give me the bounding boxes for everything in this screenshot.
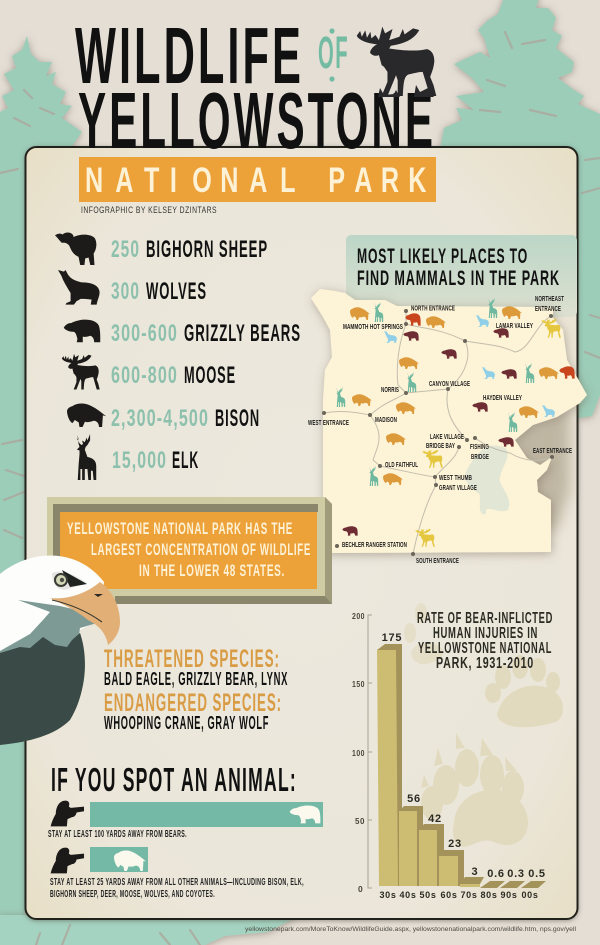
decade labels: 30s [380, 890, 396, 900]
icon: bighorn sheep [55, 232, 96, 265]
count: bison: 2,300-4,500 [111, 405, 209, 432]
count: wolves: WOLVES [146, 278, 207, 305]
map place labels: LAKE VILLAGE [430, 432, 464, 441]
bar values: 3 [472, 866, 478, 878]
map place labels: SOUTH ENTRANCE [416, 556, 459, 565]
map place labels: GRANT VILLAGE [439, 483, 477, 492]
main paper panel [26, 147, 578, 919]
y axis: 0 [358, 884, 363, 894]
decade labels: 60s [441, 890, 457, 900]
count: moose: MOOSE [184, 362, 236, 389]
threatened species: THREATENED SPECIES: [104, 645, 280, 673]
map place labels: NORRIS [381, 385, 399, 394]
subtitle band: NATIONAL PARK [85, 161, 428, 200]
byline: INFOGRAPHIC BY KELSEY DZINTARS [81, 205, 217, 215]
count: elk: ELK [172, 447, 199, 474]
map place labels: CANYON VILLAGE [429, 379, 470, 388]
other animals distance note: BIGHORN SHEEP, DEER, MOOSE, WOLVES, AND COYOTES. [50, 888, 215, 900]
icon: photographer near bear [51, 801, 84, 826]
map place labels: BECHLER RANGER STATION [342, 540, 407, 549]
callout: largest concentration: IN THE LOWER 48 STATES. [139, 561, 285, 580]
decade labels: 70s [461, 890, 477, 900]
bar values: 42 [428, 813, 442, 825]
count: bighorn sheep: BIGHORN SHEEP [146, 236, 268, 263]
count: bighorn sheep [111, 236, 268, 263]
decade labels: 50s [420, 890, 436, 900]
bar values: 175 [382, 632, 402, 644]
icon: bison [67, 404, 106, 427]
endangered species: WHOOPING CRANE, GRAY WOLF [104, 713, 269, 733]
map place labels: WEST THUMB [439, 473, 472, 482]
count: grizzly bears: GRIZZLY BEARS [184, 320, 301, 347]
other animals distance note [50, 876, 304, 900]
y axis: 150 [352, 679, 365, 689]
bear paw watermarks [404, 603, 563, 847]
map place labels: ENTRANCE [535, 304, 561, 313]
decade labels: 90s [501, 890, 517, 900]
bar values: 23 [448, 838, 462, 850]
map place labels: LAMAR VALLEY [496, 321, 533, 330]
icon: wolf [58, 270, 100, 305]
count: grizzly bears [111, 320, 301, 347]
icon: grizzly bear [64, 320, 100, 342]
callout: largest concentration: YELLOWSTONE NATIONAL PARK HAS THE [67, 519, 293, 538]
map heading [346, 235, 577, 317]
title [75, 11, 436, 165]
count: elk: 15,000 [112, 447, 167, 474]
map place labels: WEST ENTRANCE [308, 418, 349, 427]
map place labels: NORTHEAST [535, 294, 564, 303]
icon: elk [77, 434, 96, 480]
map place labels: MAMMOTH HOT SPRINGS [343, 322, 403, 331]
bar values: 0.5 [528, 868, 546, 880]
map place labels: NORTH ENTRANCE [411, 304, 455, 312]
illustration: bald eagle [0, 556, 120, 745]
source credits: yellowstonepark.com/MoreToKnow/WildlifeGuide.aspx, yellowstonenationalpark.com/wildlife.htm, nps.gov/yell [245, 926, 576, 933]
count: moose: 600-800 [111, 362, 178, 389]
title: WILDLIFE [75, 11, 304, 100]
title: OF [318, 27, 349, 78]
icon: photographer near bison [51, 848, 84, 873]
map place labels: EAST ENTRANCE [533, 446, 572, 455]
decade labels: 40s [400, 890, 416, 900]
bar values: 0.3 [507, 868, 525, 880]
heading: IF YOU SPOT AN ANIMAL: [51, 761, 297, 798]
map place labels [308, 294, 572, 565]
map place labels: HAYDEN VALLEY [483, 393, 522, 402]
bar values [382, 632, 546, 880]
threatened species: BALD EAGLE, GRIZZLY BEAR, LYNX [104, 669, 288, 689]
count: wolves [111, 278, 207, 305]
threatened species [104, 645, 288, 689]
count: wolves: 300 [111, 278, 140, 305]
lake [465, 445, 509, 514]
map east side shadow [510, 405, 570, 530]
chart title: PARK, 1931-2010 [436, 655, 534, 672]
map location dots [322, 309, 554, 556]
endangered species: ENDANGERED SPECIES: [104, 689, 282, 717]
y axis: 50 [355, 816, 365, 826]
distance bar: 25 yards [90, 847, 148, 872]
map of the park [308, 289, 587, 565]
map place labels: OLD FAITHFUL [385, 460, 418, 469]
icon: moose [62, 354, 100, 389]
map place labels: BRIDGE BAY [426, 441, 455, 450]
bar chart: bear-inflicted injuries [352, 610, 553, 900]
bar values: 0.6 [487, 868, 505, 880]
count: bighorn sheep: 250 [111, 236, 140, 263]
bars [377, 644, 546, 888]
species status [104, 645, 288, 733]
endangered species [104, 689, 282, 733]
map place labels: MADISON [375, 415, 397, 424]
callout: largest concentration [47, 497, 332, 604]
distance bar: 100 yards [90, 802, 323, 827]
map place labels: BRIDGE [471, 452, 489, 461]
icon: moose on title [357, 27, 436, 97]
y axis: 100 [352, 748, 365, 758]
roads [324, 311, 552, 554]
right pine tree and side strip [440, 0, 600, 418]
decade labels: 80s [481, 890, 497, 900]
decade labels: 00s [522, 890, 538, 900]
decade labels [380, 890, 538, 900]
count: bison: BISON [215, 405, 260, 432]
park outline [311, 289, 587, 553]
map place labels: FISHING [470, 442, 489, 451]
other animals distance note: STAY AT LEAST 25 YARDS AWAY FROM ALL OTHER ANIMALS—INCLUDING BISON, ELK, [50, 876, 304, 888]
count: grizzly bears: 300-600 [111, 320, 178, 347]
bar values: 56 [407, 793, 421, 805]
y axis: 200 [352, 611, 365, 621]
y axis [352, 611, 372, 894]
bottom tree strip [0, 915, 300, 945]
callout: largest concentration: LARGEST CONCENTRATION OF WILDLIFE [91, 540, 311, 559]
panel: population counts [55, 232, 301, 480]
left pine tree and side strip [0, 36, 82, 945]
panel: if you spot an animal [48, 761, 323, 900]
bear distance note: STAY AT LEAST 100 YARDS AWAY FROM BEARS. [48, 828, 187, 840]
chart title [417, 610, 553, 672]
map animals [336, 298, 575, 547]
